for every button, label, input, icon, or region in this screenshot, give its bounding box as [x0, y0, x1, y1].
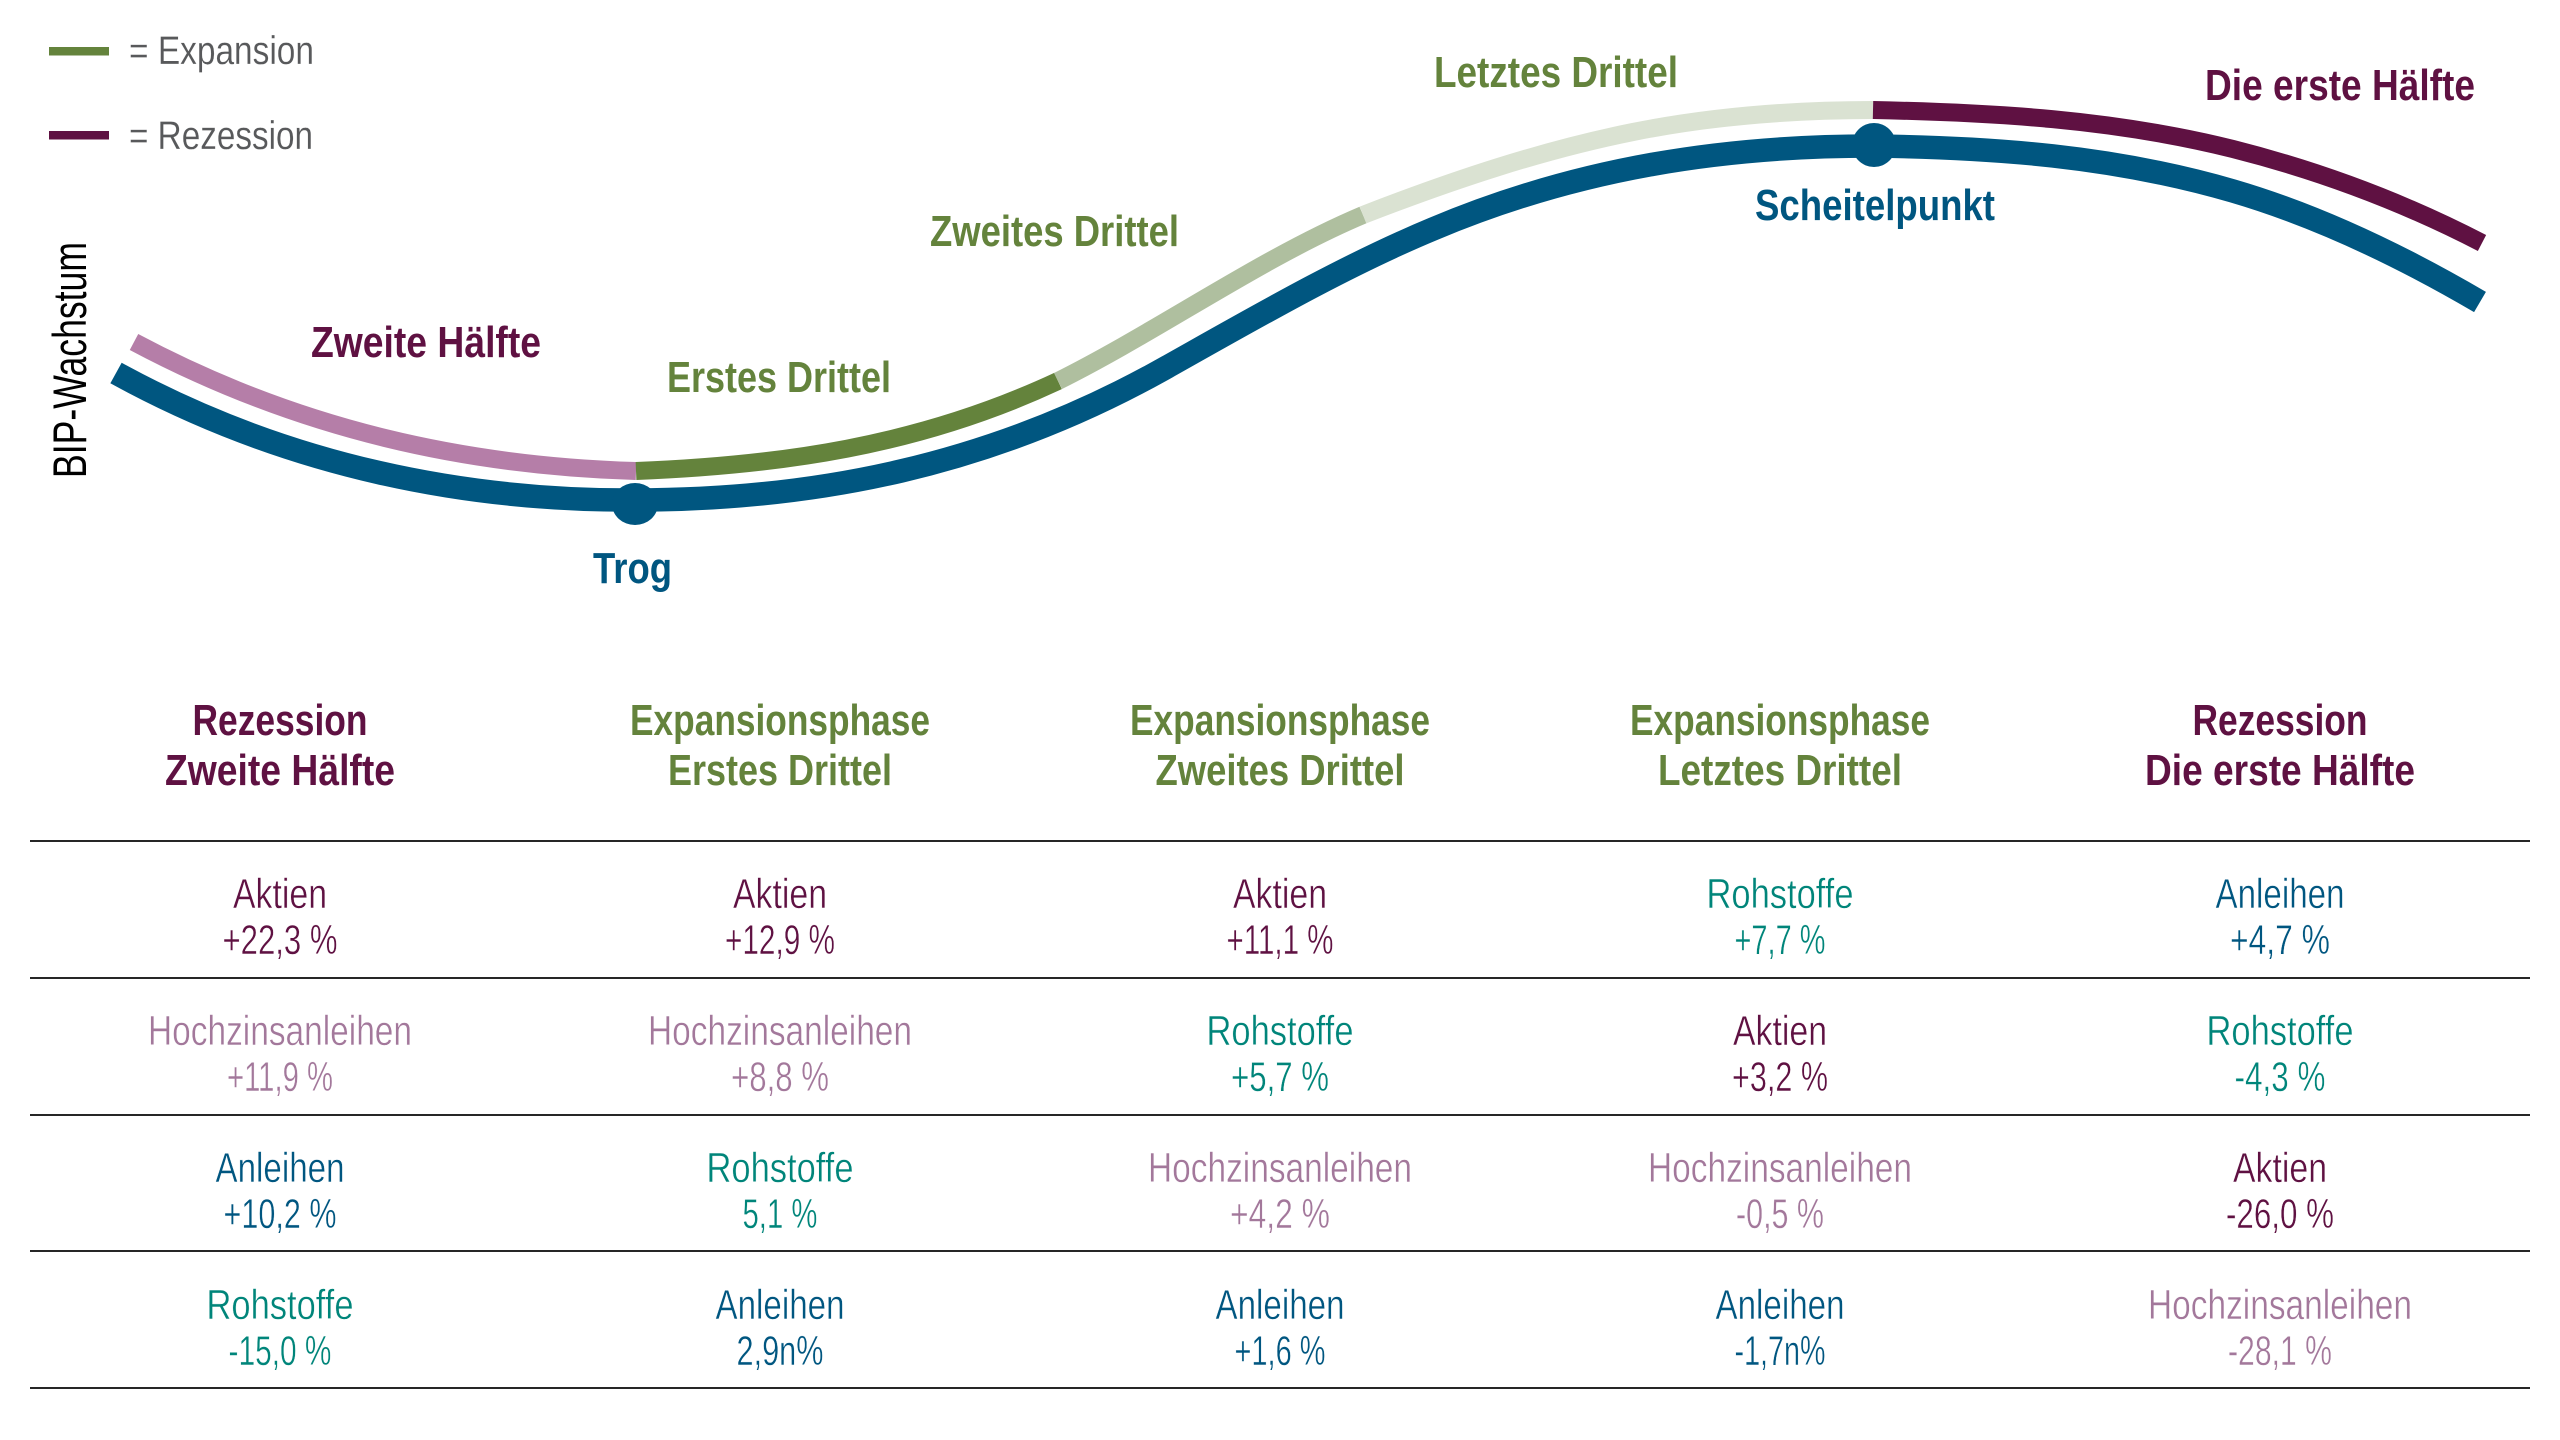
cell: Rohstoffe -15,0 %: -15,0 % [228, 1327, 332, 1374]
column header: expansion last third: Letztes Drittel [1658, 746, 1902, 795]
cell: Aktien +22,3 % [222, 870, 338, 963]
cell: Anleihen +4,7 %: Anleihen [2216, 870, 2344, 917]
column header: expansion second third: Expansionsphase [1130, 696, 1430, 745]
cell: Aktien -26,0 %: -26,0 % [2226, 1190, 2334, 1237]
cell: Hochzinsanleihen +8,8 % [648, 1007, 912, 1100]
cell: Rohstoffe 5,1 %: Rohstoffe [706, 1144, 854, 1191]
cell: Rohstoffe +5,7 %: +5,7 % [1231, 1053, 1329, 1100]
column header: expansion first third [630, 696, 930, 795]
cell: Anleihen -1,7n% [1716, 1281, 1844, 1374]
legend item: expansion [49, 29, 314, 73]
cell: Aktien +3,2 %: +3,2 % [1732, 1053, 1828, 1100]
column header: expansion first third: Expansionsphase [630, 696, 930, 745]
cell: Anleihen +4,7 %: +4,7 % [2230, 916, 2330, 963]
chart label: Scheitelpunkt: Scheitelpunkt [1755, 181, 1995, 230]
cell: Aktien -26,0 % [2226, 1144, 2334, 1237]
column header: recession second half [165, 696, 395, 795]
cell: Hochzinsanleihen +11,9 %: +11,9 % [227, 1053, 333, 1100]
cell: Rohstoffe +7,7 %: Rohstoffe [1706, 870, 1854, 917]
table: asset returns by phase [30, 696, 2530, 1388]
cell: Hochzinsanleihen -0,5 %: Hochzinsanleihen [1648, 1144, 1912, 1191]
chart label: Erstes Drittel: Erstes Drittel [667, 353, 891, 402]
column header: expansion last third [1630, 696, 1930, 795]
cell: Hochzinsanleihen +11,9 %: Hochzinsanleihen [148, 1007, 412, 1054]
cell: Anleihen 2,9n% [716, 1281, 844, 1374]
cell: Aktien +11,1 %: +11,1 % [1226, 916, 1334, 963]
row 1 [222, 870, 2344, 963]
chart label: Die erste Hälfte: Die erste Hälfte [2205, 61, 2475, 110]
curve segment: recession second half [134, 342, 636, 471]
column header: expansion first third: Erstes Drittel [668, 746, 892, 795]
chart label: Letztes Drittel: Letztes Drittel [1434, 48, 1678, 97]
cell: Anleihen +4,7 % [2216, 870, 2344, 963]
chart: business cycle curve [116, 110, 2482, 525]
row 3 [216, 1144, 2334, 1237]
cell: Hochzinsanleihen +4,2 %: Hochzinsanleihen [1148, 1144, 1412, 1191]
column header: recession first half: Rezession [2192, 696, 2368, 745]
cell: Aktien +12,9 % [725, 870, 835, 963]
marker: trough [612, 483, 658, 525]
cell: Rohstoffe -4,3 % [2206, 1007, 2354, 1100]
cell: Anleihen +1,6 %: +1,6 % [1234, 1327, 1326, 1374]
marker: peak [1852, 123, 1896, 167]
cell: Hochzinsanleihen +11,9 % [148, 1007, 412, 1100]
column header: expansion last third: Expansionsphase [1630, 696, 1930, 745]
legend item: expansion: = Expansion [129, 29, 314, 73]
y-axis label: BIP-Wachstum [43, 242, 96, 478]
cell: Aktien +3,2 %: Aktien [1733, 1007, 1827, 1054]
cell: Anleihen +1,6 %: Anleihen [1216, 1281, 1344, 1328]
cell: Hochzinsanleihen -0,5 % [1648, 1144, 1912, 1237]
column header: recession second half: Zweite Hälfte [165, 746, 395, 795]
cell: Hochzinsanleihen -0,5 %: -0,5 % [1736, 1190, 1824, 1237]
curve segment: recession first half [1873, 110, 2482, 243]
row 2 [148, 1007, 2354, 1100]
column header: expansion second third: Zweites Drittel [1156, 746, 1404, 795]
cell: Rohstoffe -4,3 %: -4,3 % [2234, 1053, 2326, 1100]
cell: Rohstoffe 5,1 %: 5,1 % [742, 1190, 818, 1237]
legend item: recession [49, 114, 313, 158]
cell: Anleihen +10,2 %: +10,2 % [224, 1190, 336, 1237]
legend item: recession: = Rezession [129, 114, 313, 158]
cell: Hochzinsanleihen +8,8 %: Hochzinsanleihen [648, 1007, 912, 1054]
cell: Rohstoffe +5,7 % [1206, 1007, 1354, 1100]
cell: Hochzinsanleihen -28,1 % [2148, 1281, 2412, 1374]
cell: Hochzinsanleihen +4,2 % [1148, 1144, 1412, 1237]
cell: Rohstoffe -15,0 %: Rohstoffe [206, 1281, 354, 1328]
cell: Aktien +3,2 % [1732, 1007, 1828, 1100]
cell: Rohstoffe +5,7 %: Rohstoffe [1206, 1007, 1354, 1054]
cell: Rohstoffe +7,7 %: +7,7 % [1734, 916, 1826, 963]
row 4 [206, 1281, 2412, 1374]
cell: Anleihen +10,2 % [216, 1144, 344, 1237]
cell: Rohstoffe +7,7 % [1706, 870, 1854, 963]
column header: recession second half: Rezession [192, 696, 368, 745]
cell: Aktien +11,1 %: Aktien [1233, 870, 1327, 917]
cell: Hochzinsanleihen -28,1 %: Hochzinsanleihen [2148, 1281, 2412, 1328]
cell: Anleihen -1,7n%: Anleihen [1716, 1281, 1844, 1328]
cell: Aktien +22,3 %: Aktien [233, 870, 327, 917]
cell: Anleihen -1,7n%: -1,7n% [1734, 1327, 1826, 1374]
cell: Hochzinsanleihen +8,8 %: +8,8 % [731, 1053, 829, 1100]
chart label: Zweites Drittel: Zweites Drittel [930, 207, 1179, 256]
cell: Rohstoffe -4,3 %: Rohstoffe [2206, 1007, 2354, 1054]
column header: recession first half [2145, 696, 2415, 795]
cell: Rohstoffe -15,0 % [206, 1281, 354, 1374]
cell: Anleihen 2,9n%: Anleihen [716, 1281, 844, 1328]
cell: Aktien -26,0 %: Aktien [2233, 1144, 2327, 1191]
cell: Aktien +11,1 % [1226, 870, 1334, 963]
chart label: Trog: Trog [593, 544, 672, 593]
cell: Rohstoffe 5,1 % [706, 1144, 854, 1237]
curve segment: expansion second third [1058, 215, 1363, 381]
cell: Hochzinsanleihen -28,1 %: -28,1 % [2228, 1327, 2332, 1374]
column header: recession first half: Die erste Hälfte [2145, 746, 2415, 795]
cell: Aktien +12,9 %: +12,9 % [725, 916, 835, 963]
curve segment: expansion last third [1363, 110, 1873, 215]
chart label: Zweite Hälfte: Zweite Hälfte [311, 318, 541, 367]
curve segment: expansion first third [636, 381, 1058, 471]
cell: Hochzinsanleihen +4,2 %: +4,2 % [1230, 1190, 1330, 1237]
cell: Aktien +22,3 %: +22,3 % [222, 916, 338, 963]
cell: Anleihen +10,2 %: Anleihen [216, 1144, 344, 1191]
legend [49, 29, 314, 158]
cell: Aktien +12,9 %: Aktien [733, 870, 827, 917]
column header: expansion second third [1130, 696, 1430, 795]
cell: Anleihen +1,6 % [1216, 1281, 1344, 1374]
curve: GDP growth line [116, 146, 2480, 500]
cell: Anleihen 2,9n%: 2,9n% [736, 1327, 824, 1374]
